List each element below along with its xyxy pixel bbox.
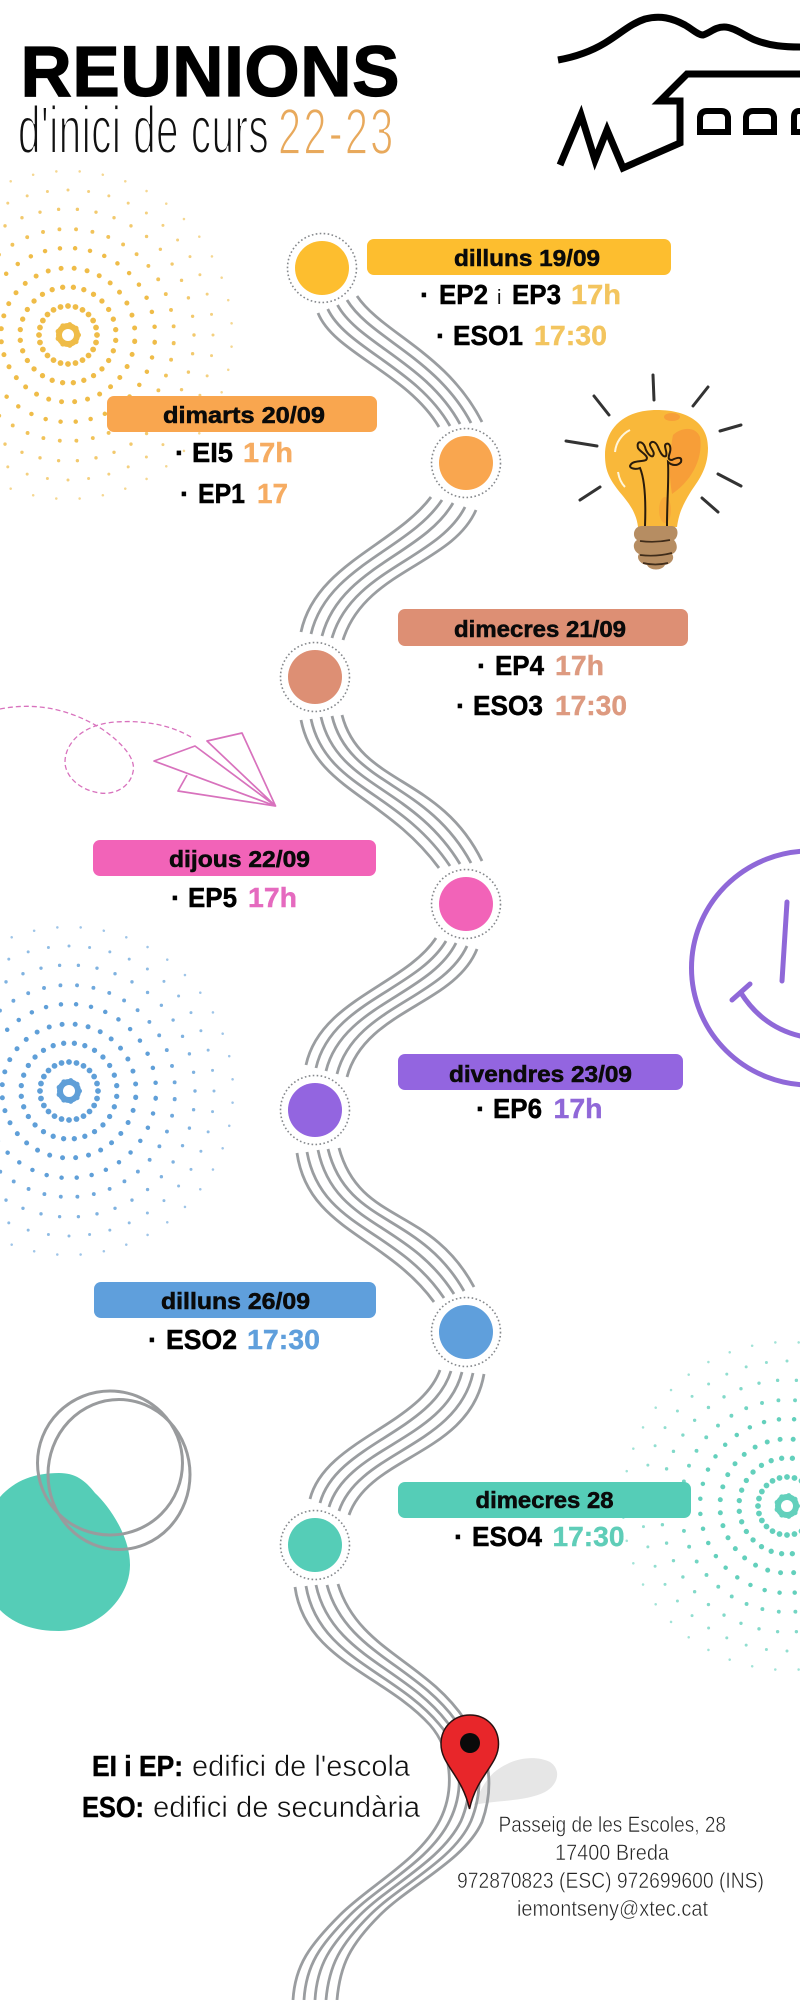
filament: [630, 442, 681, 526]
date label: dijous 22/09: [169, 846, 310, 872]
bulb highlights: [615, 430, 630, 487]
contact details: 17400 Breda: [555, 1840, 670, 1865]
title block: [18, 33, 400, 168]
schedule line ESO4: ESO4: [472, 1521, 542, 1552]
smiley face: [692, 851, 800, 1085]
dotted rosette: yellow: [0, 160, 243, 510]
schedule line EI5: EI5: [192, 437, 233, 468]
panel: dilluns 26/09: [94, 1282, 376, 1355]
schedule line EP6: [476, 1093, 602, 1124]
date pill: [93, 840, 376, 876]
schedule line EP5: [171, 882, 297, 913]
schedule line EP6: ·: [476, 1093, 485, 1124]
schedule line ESO4: ·: [454, 1521, 463, 1552]
contact details: [457, 1812, 764, 1921]
schedule line ESO1: [436, 320, 607, 351]
contact details: 972870823 (ESC) 972699600 (INS): [457, 1868, 764, 1893]
node 2: orange: [432, 428, 500, 498]
title: REUNIONS: REUNIONS: [20, 33, 400, 112]
panel: dilluns 19/09: [367, 239, 671, 351]
schedule line EP2 i EP3: EP2: [439, 279, 488, 310]
date label: dimarts 20/09: [163, 402, 325, 428]
date pill: [107, 396, 377, 432]
grey hand-drawn rings: [38, 1391, 190, 1550]
date pill: [398, 1054, 683, 1090]
subtitle: d'inici de curs: d'inici de curs: [18, 92, 269, 168]
schedule line ESO4: [454, 1521, 624, 1552]
panel: dijous 22/09: [93, 840, 376, 913]
logo: mountains and school building: [558, 17, 800, 168]
node 3: salmon: [280, 642, 350, 712]
schedule line ESO3: 17:30: [555, 690, 627, 721]
schedule line EP1: 17: [257, 478, 288, 509]
winding road: [293, 296, 489, 2000]
bulb shades: [659, 413, 701, 523]
schedule line EP4: 17h: [555, 650, 604, 681]
light rays: [566, 375, 741, 512]
schedule line EP2 i EP3: 17h: [571, 279, 621, 310]
panel: dimecres 21/09: [398, 609, 688, 721]
contact details: Passeig de les Escoles, 28: [498, 1812, 726, 1837]
dashed trail: [0, 706, 191, 793]
legend: buildings: edifici de l'escola: [192, 1750, 410, 1783]
schedule line EP1: EP1: [198, 478, 245, 509]
location pin: [441, 1715, 498, 1809]
schedule line EI5: [175, 437, 293, 468]
dotted rosette: teal: [612, 1331, 800, 1681]
schedule line EP5: ·: [171, 882, 180, 913]
schedule line EP5: EP5: [188, 882, 237, 913]
bulb base: [634, 526, 678, 570]
schedule line ESO2: 17:30: [247, 1324, 320, 1355]
contact details: iemontseny@xtec.cat: [517, 1896, 708, 1921]
schedule line EP6: EP6: [493, 1093, 542, 1124]
panel: dimecres 28: [398, 1482, 691, 1552]
paper plane with dashed trail: [0, 706, 276, 806]
plane: [154, 733, 276, 806]
schedule line ESO2: ESO2: [166, 1324, 237, 1355]
schedule line EP6: 17h: [554, 1093, 602, 1124]
legend: buildings: [82, 1750, 420, 1824]
date label: dimecres 21/09: [454, 616, 626, 642]
teal blob: [0, 1473, 130, 1631]
schedule line ESO3: ESO3: [473, 690, 543, 721]
schedule line EP4: EP4: [495, 650, 544, 681]
schedule line EP2 i EP3: i: [497, 287, 501, 309]
date label: divendres 23/09: [449, 1061, 632, 1087]
schedule line EP4: ·: [477, 650, 486, 681]
legend: buildings: edifici de secundària: [153, 1791, 420, 1824]
schedule line EI5: ·: [175, 437, 184, 468]
schedule line EP5: 17h: [248, 882, 297, 913]
schedule line EP1: ·: [180, 478, 189, 509]
date pill: [94, 1282, 376, 1318]
date pill: [398, 1482, 691, 1518]
schedule line ESO2: ·: [148, 1324, 157, 1355]
legend: buildings: ESO:: [82, 1792, 144, 1824]
schedule line EP4: [477, 650, 604, 681]
panel: dimarts 20/09: [107, 396, 377, 509]
schedule line ESO1: ESO1: [453, 320, 523, 351]
bulb glass: [605, 410, 708, 527]
date label: dilluns 19/09: [454, 245, 600, 271]
lightbulb icon: [566, 375, 741, 570]
legend: buildings: EI i EP:: [92, 1751, 183, 1783]
dotted rosette: blue: [0, 916, 244, 1266]
schedule line EP1: [180, 478, 288, 509]
node 6: blue: [432, 1298, 500, 1366]
date pill: [398, 609, 688, 646]
schedule line EI5: 17h: [243, 437, 293, 468]
schedule line ESO2: [148, 1324, 320, 1355]
node 4: pink: [432, 870, 500, 938]
schedule line ESO3: ·: [456, 690, 465, 721]
node 5: purple: [280, 1076, 350, 1144]
schedule line EP2 i EP3: ·: [420, 279, 429, 310]
schedule line ESO1: 17:30: [534, 320, 607, 351]
schedule line ESO3: [456, 690, 627, 721]
panel: divendres 23/09: [398, 1054, 683, 1124]
date label: dimecres 28: [476, 1487, 614, 1513]
schedule line ESO4: 17:30: [552, 1521, 624, 1552]
schedule line EP2 i EP3: [420, 279, 621, 310]
date label: dilluns 26/09: [161, 1288, 310, 1314]
pin shadow: [474, 1758, 557, 1805]
schedule line EP2 i EP3: EP3: [512, 279, 561, 310]
node 1: yellow: [288, 234, 356, 302]
node 7: teal: [280, 1510, 350, 1580]
subtitle: 22-23: 22-23: [278, 96, 396, 168]
date pill: [367, 239, 671, 275]
schedule line ESO1: ·: [436, 320, 445, 351]
